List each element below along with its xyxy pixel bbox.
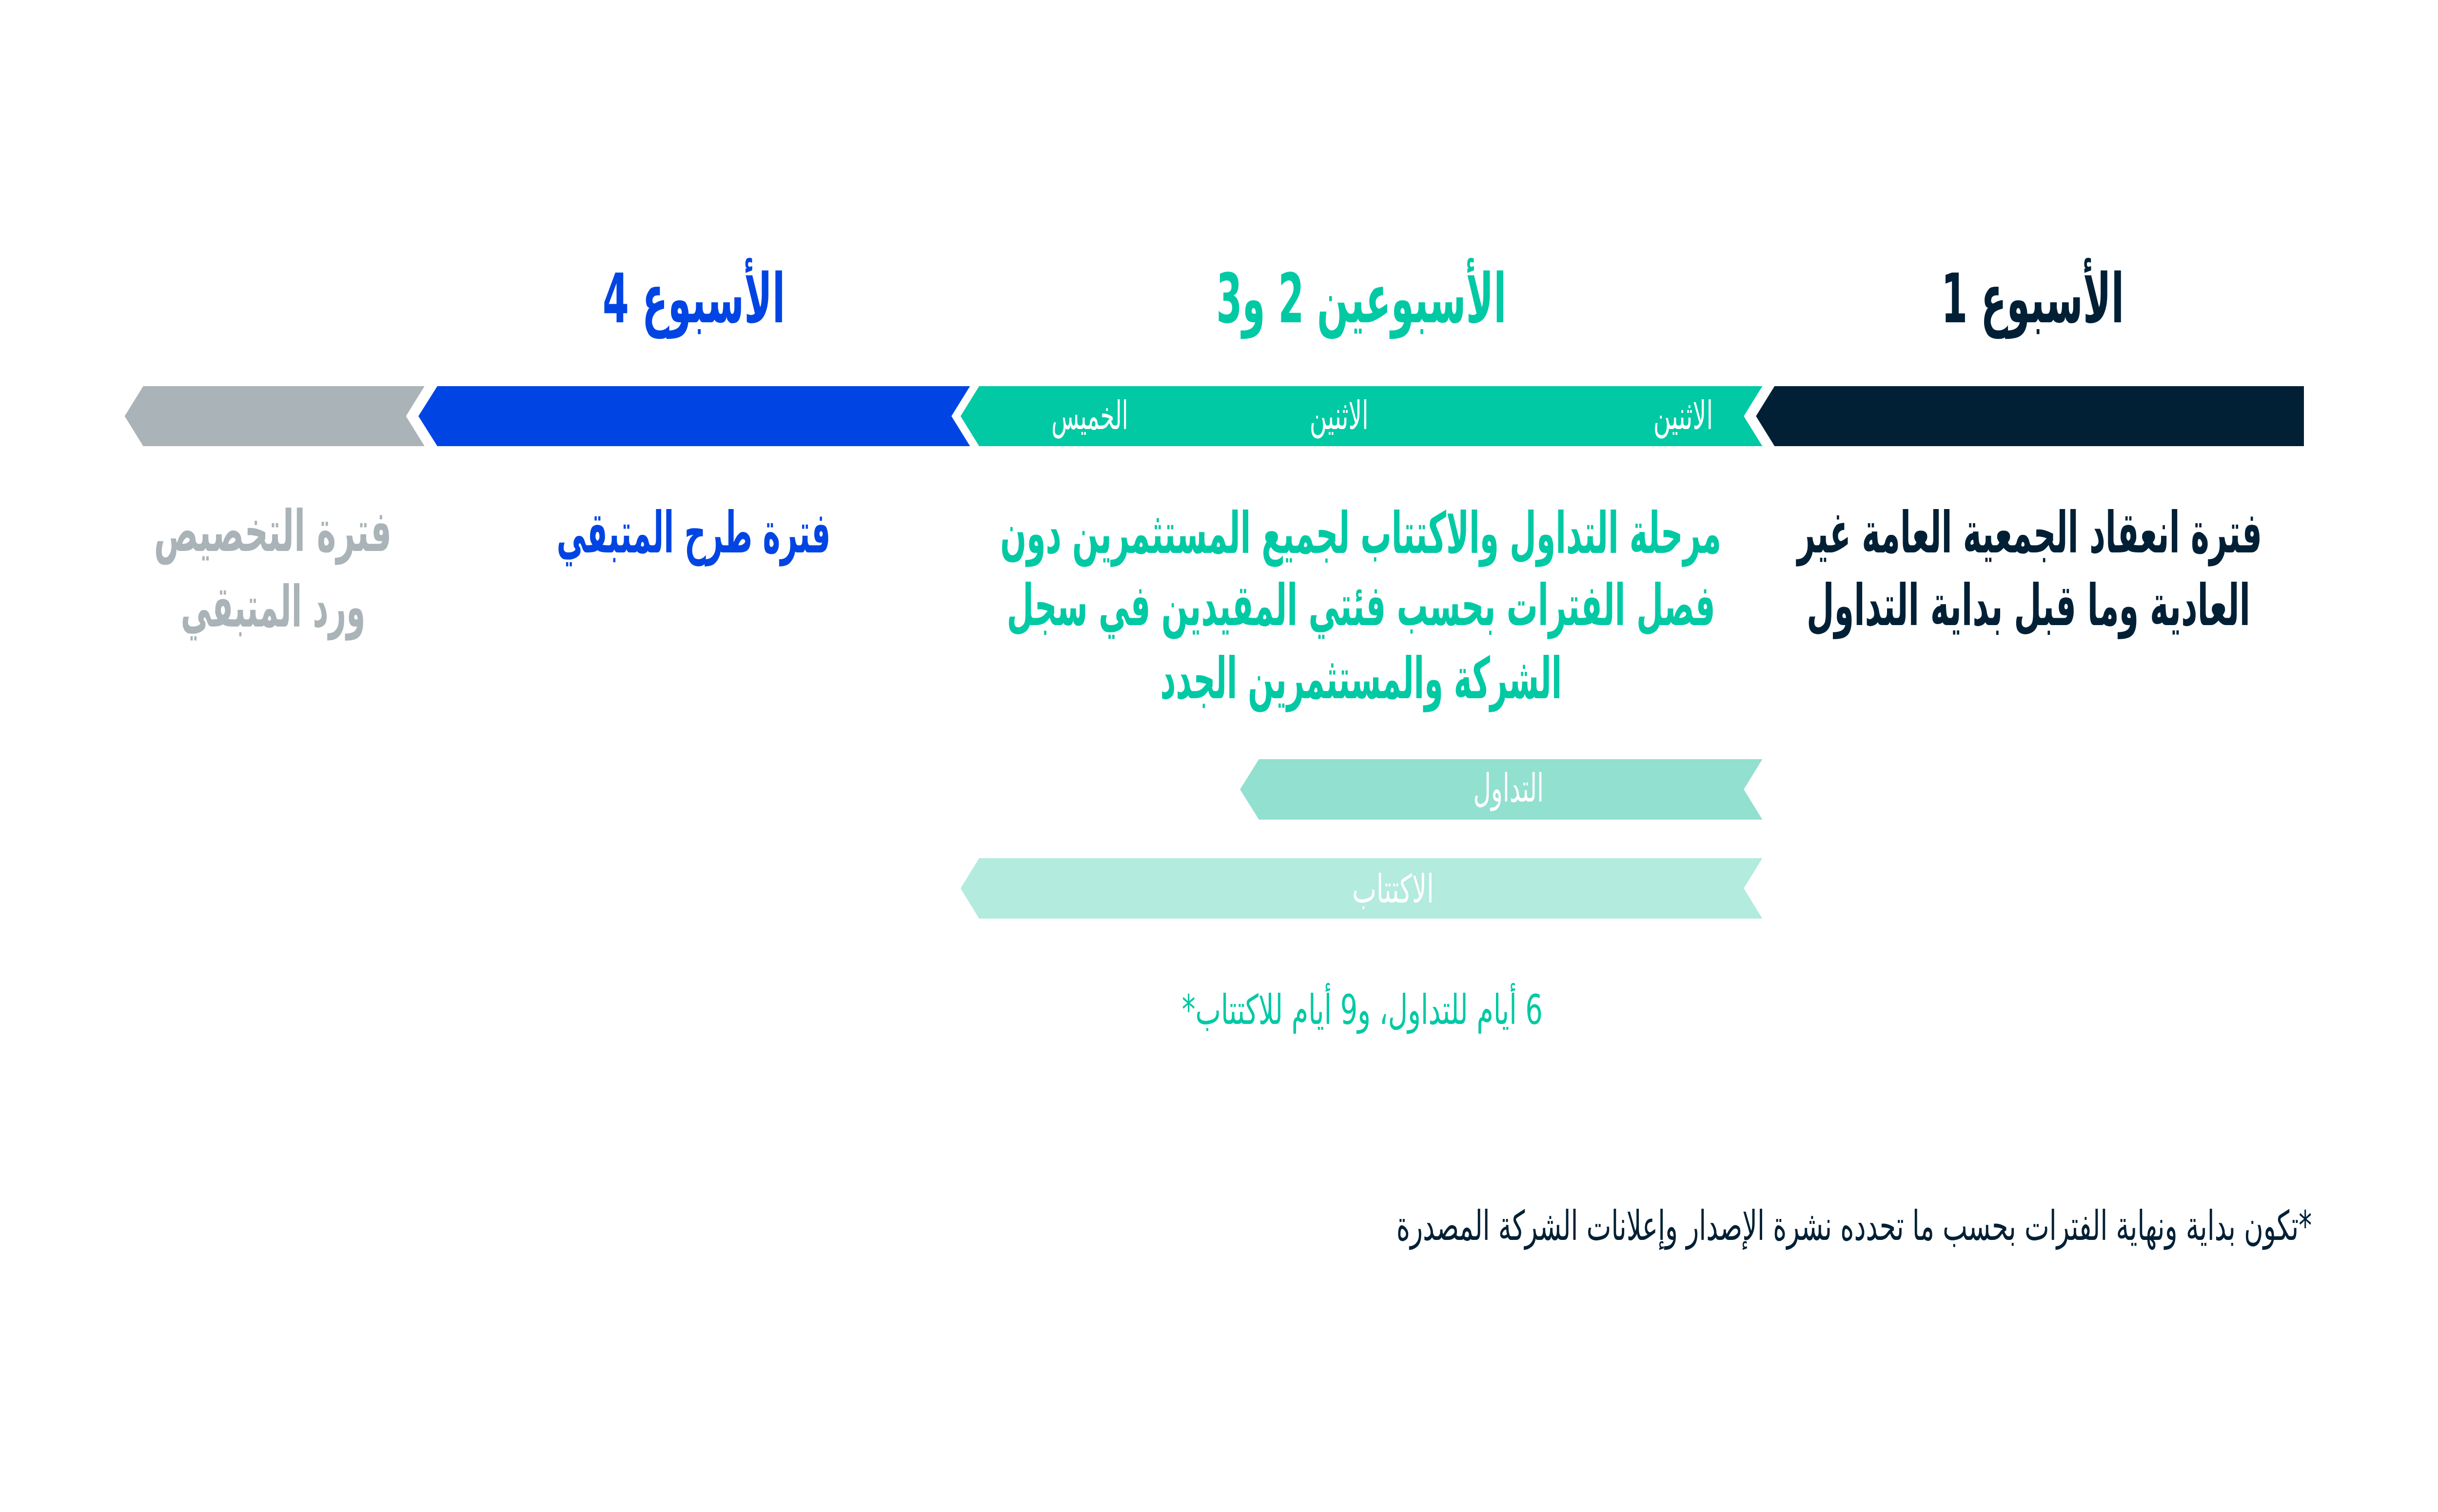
heading: week 1: الأسبوع 1 [1941, 257, 2124, 339]
arrow: allocation bar [125, 386, 425, 446]
arrow: weeks 2 and 3 bar [961, 386, 1762, 446]
text block: allocation description: ورد المتبقي [181, 574, 365, 641]
label: trading: التداول [1474, 766, 1544, 811]
text block: week 1 description: فترة انعقاد الجمعية العامة غير [1796, 500, 2262, 567]
callout: duration note: 6 أيام للتداول، و9 أيام للاكتتاب* [1182, 983, 1543, 1035]
panel: allocation and refund [125, 386, 425, 641]
arrow: trading period bar [1240, 759, 1762, 820]
text block: weeks 2 and 3 description: فصل الفترات بحسب فئتي المقيدين في سجل [1007, 572, 1715, 639]
text block: weeks 2 and 3 description: الشركة والمستثمرين الجدد [1160, 646, 1562, 712]
text block: week 1 description: العادية وما قبل بداية التداول [1807, 572, 2250, 639]
label: first Monday: الاثنين [1653, 393, 1713, 439]
footnote: *تكون بداية ونهاية الفترات بحسب ما تحدده نشرة الإصدار وإعلانات الشركة المصدرة [1396, 1202, 2312, 1251]
text block: weeks 2 and 3 description [1000, 500, 1721, 712]
arrow: week 1 bar [1756, 386, 2304, 446]
heading: weeks 2 and 3: الأسبوعين 2 و3 [1216, 257, 1506, 339]
heading: week 4: الأسبوع 4 [603, 257, 785, 339]
label: subscription: الاكتتاب [1352, 866, 1434, 912]
text block: allocation description: فترة التخصيص [154, 498, 392, 565]
text block: week 4 description: فترة طرح المتبقي [557, 500, 830, 567]
panel: week 4 [418, 257, 970, 567]
label: Thursday: الخميس [1051, 393, 1128, 438]
label: second Monday: الاثنين [1310, 393, 1369, 439]
text block: allocation description [154, 498, 392, 641]
panel: weeks 2 and 3 [961, 257, 1762, 1035]
text block: week 1 description [1796, 500, 2262, 639]
arrow: subscription period bar [961, 858, 1762, 919]
panel: week 1 [1756, 257, 2304, 639]
arrow: week 4 bar [418, 386, 970, 446]
text block: weeks 2 and 3 description: مرحلة التداول والاكتتاب لجميع المستثمرين دون [1000, 500, 1721, 567]
